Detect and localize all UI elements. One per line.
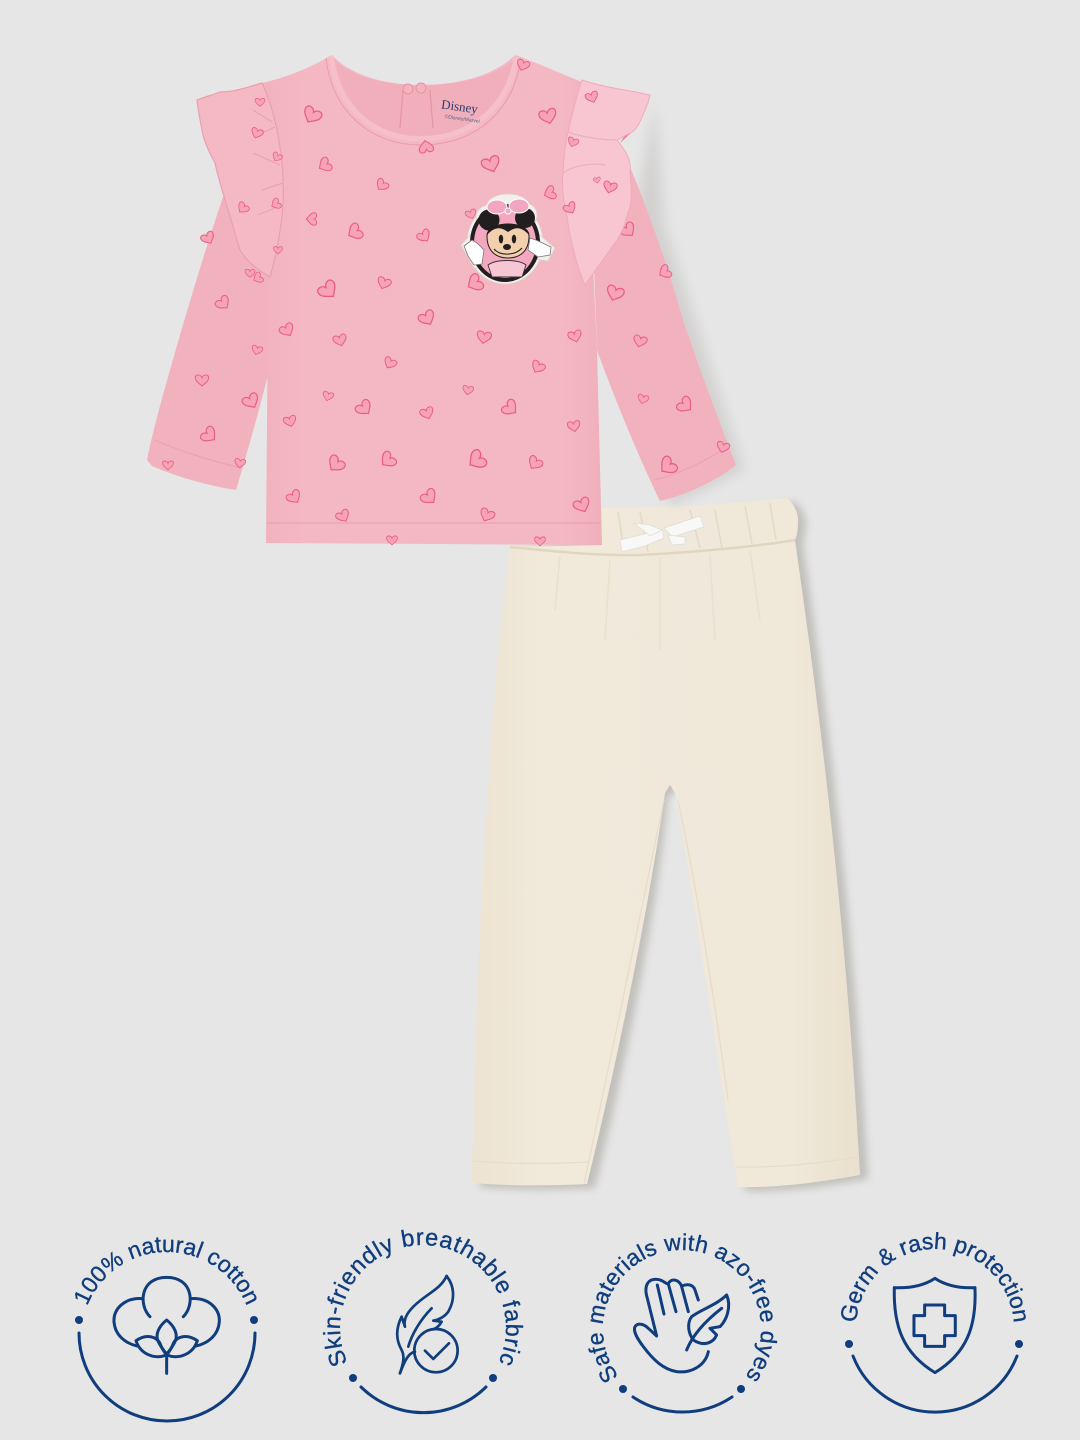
patch white border [461, 194, 555, 284]
neck label: ©Disney/Marvel [444, 113, 480, 125]
side dots and lower arc [619, 1385, 745, 1412]
right sleeve [590, 143, 736, 501]
badge: 100% natural cotton [75, 1237, 258, 1422]
badge: skin-friendly breathable fabric [322, 1230, 524, 1414]
left cuff stitch [155, 440, 242, 468]
pants shadow [480, 502, 868, 1191]
right sleeve shadow [620, 102, 744, 506]
collar band [331, 56, 516, 139]
icon: feather with check [397, 1276, 458, 1373]
curved label: Safe materials with azo-free dyes [588, 1233, 778, 1382]
hem stitching and side seams [473, 800, 858, 1184]
icon: cotton boll [114, 1277, 219, 1373]
Minnie Mouse patch [461, 194, 555, 284]
drawstring bow [620, 516, 704, 552]
ears [478, 208, 535, 230]
badge: safe materials with azo-free dyes [588, 1233, 778, 1414]
heart print [163, 58, 730, 546]
long-sleeve top [147, 55, 736, 546]
waistband seam [510, 540, 795, 555]
back placket and button [400, 83, 433, 128]
body [262, 55, 602, 545]
curved label: Skin-friendly breathable fabric [322, 1230, 524, 1366]
right cuff stitch [654, 446, 728, 480]
hem stitch [267, 522, 601, 524]
icon: shield with cross [894, 1278, 975, 1373]
dress [488, 260, 526, 277]
left ruffle [197, 83, 283, 277]
bow [487, 199, 529, 214]
side dots and lower arc [845, 1340, 1023, 1412]
pants [472, 498, 860, 1187]
faint leg folds [555, 550, 760, 650]
eyes, nose and smile [494, 235, 522, 254]
collar stitch [326, 58, 521, 145]
pants legs [472, 498, 860, 1187]
curved label: 100% natural cotton [75, 1237, 257, 1305]
black ring [472, 206, 538, 280]
left sleeve [147, 197, 285, 490]
neck opening [335, 60, 513, 136]
icon: hand with feather [634, 1279, 729, 1372]
face [487, 224, 529, 258]
right ruffle [562, 80, 650, 285]
gloves [464, 238, 551, 265]
waistband gathers [618, 503, 776, 552]
neck label: Disney [440, 96, 479, 116]
neck label [439, 96, 482, 125]
curved label: Germ & rash protection [841, 1232, 1026, 1322]
badge: germ and rash protection [841, 1232, 1026, 1414]
side dots and lower arc [349, 1374, 497, 1413]
side dots and lower arc [75, 1316, 258, 1421]
